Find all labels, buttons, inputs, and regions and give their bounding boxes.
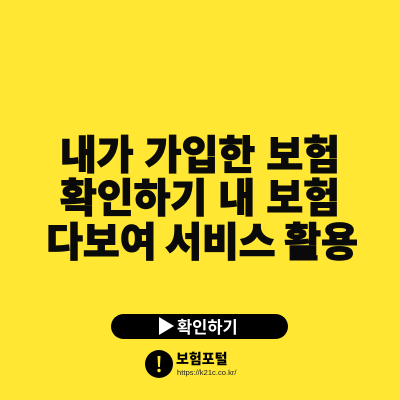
title: 내가 가입한 보험	[60, 123, 340, 181]
brand name: 보험포털	[176, 349, 228, 369]
button play triangle	[159, 317, 174, 335]
button: 확인하기	[111, 314, 288, 339]
button label: 확인하기	[177, 314, 238, 338]
title: 다보여 서비스 활용	[46, 210, 358, 268]
icon: exclamation circle	[145, 350, 173, 378]
title: 확인하기 내 보험	[60, 166, 340, 224]
url: https://k21c.co.kr/	[177, 368, 237, 377]
title	[46, 123, 358, 268]
